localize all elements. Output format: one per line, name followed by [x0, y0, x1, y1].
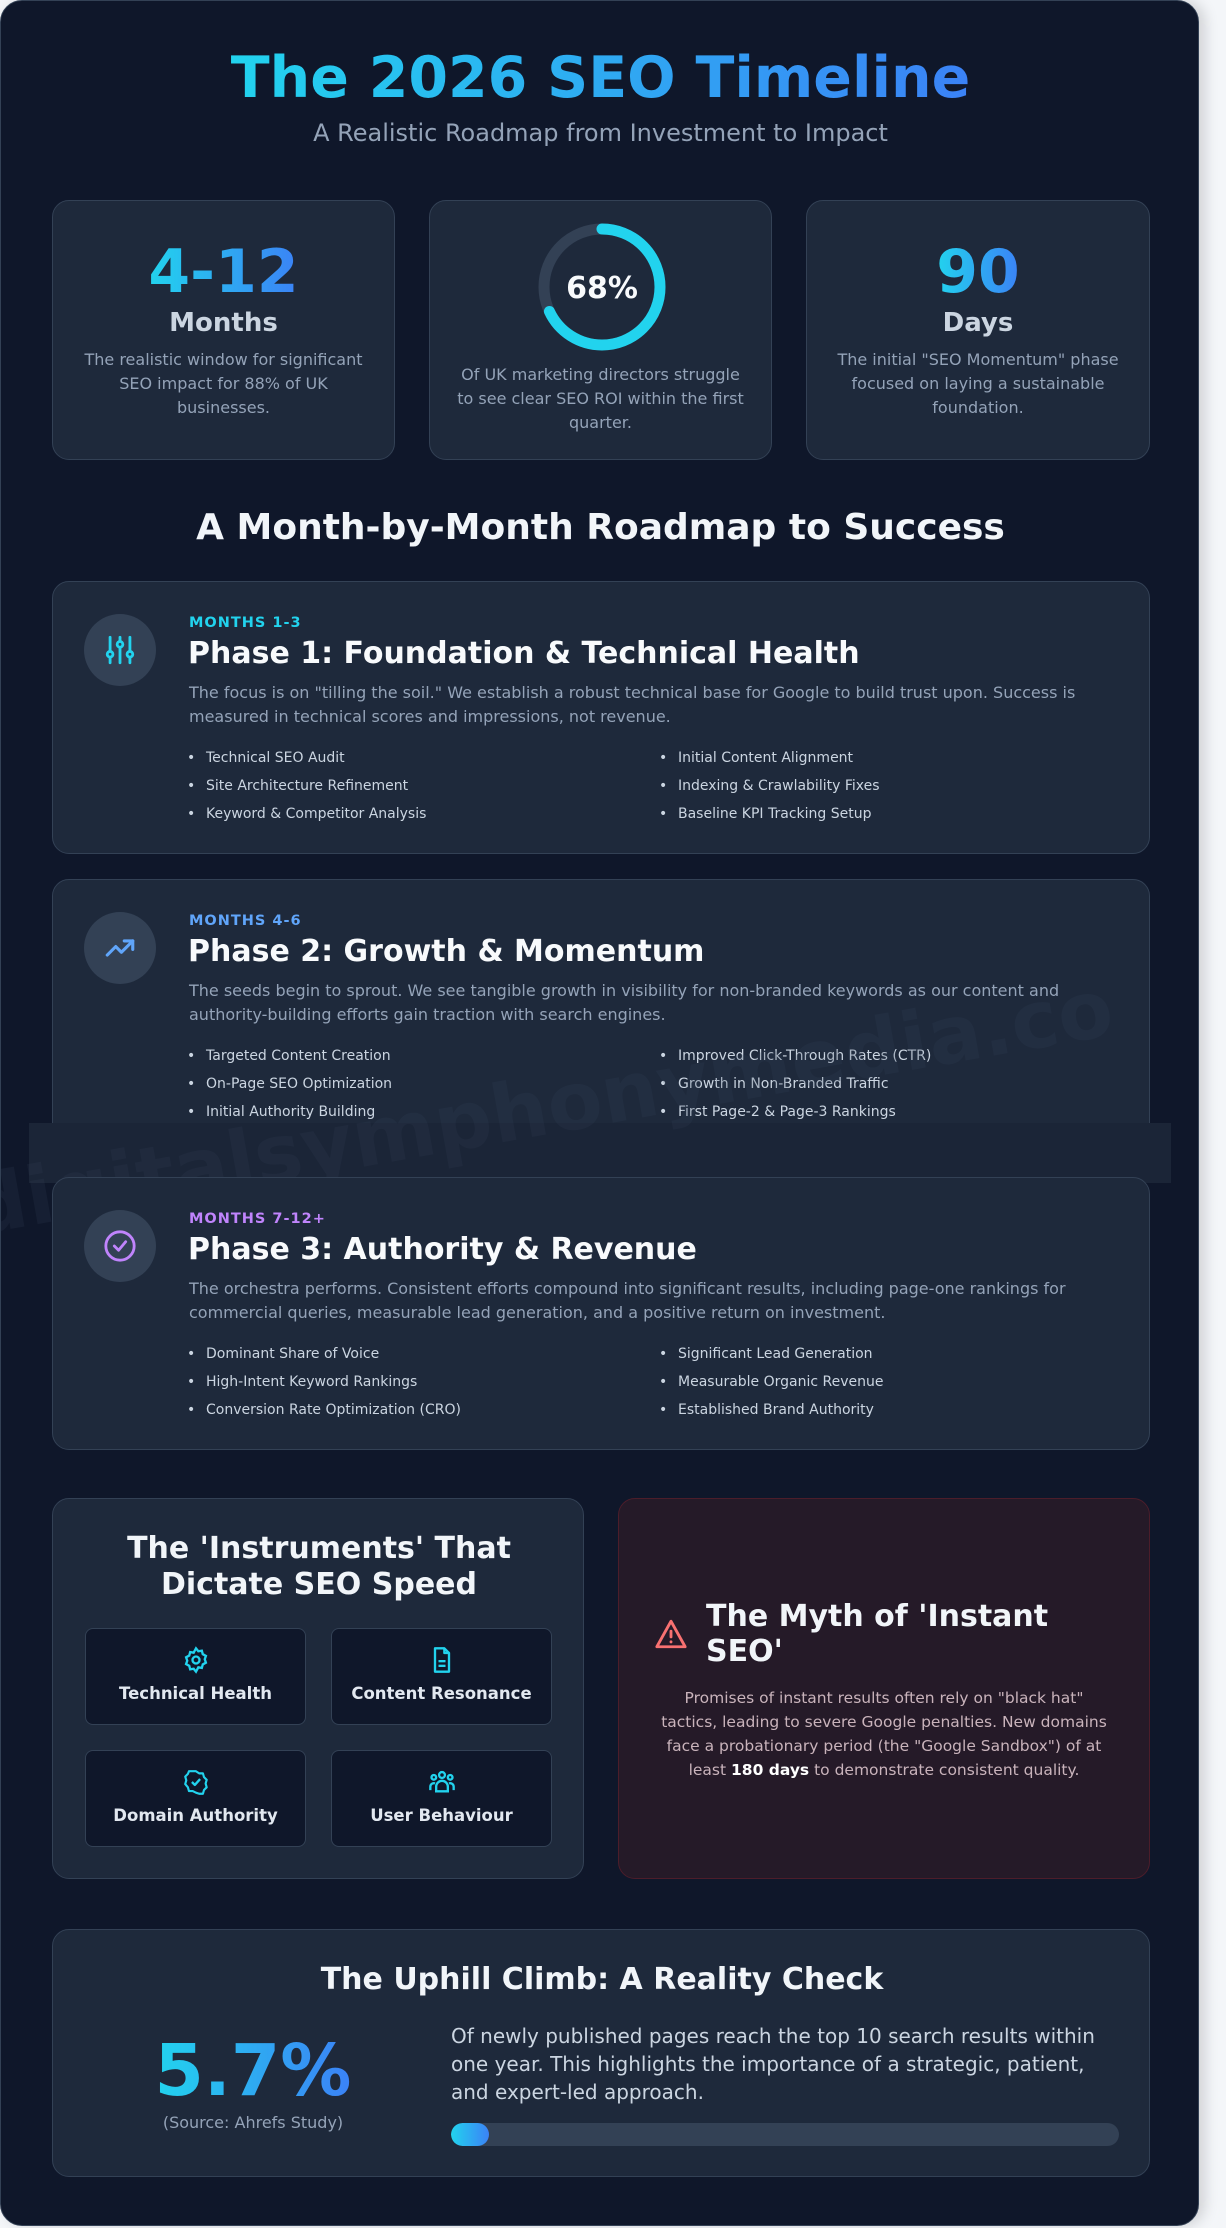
- myth body: Promises of instant results often rely on "black hat": [685, 1689, 1083, 1707]
- phase 1 card: Baseline KPI Tracking Setup: [678, 806, 872, 822]
- instruments heading: [127, 1531, 511, 1602]
- instrument: user behaviour: User Behaviour: [370, 1806, 513, 1825]
- instrument: user behaviour: [331, 1750, 552, 1847]
- icon: sliders: [84, 614, 156, 686]
- stat card: 90 days: Days: [943, 308, 1013, 338]
- phase 3 card: Dominant Share of Voice: [206, 1346, 379, 1362]
- stat card: 4-12 months: [52, 200, 395, 460]
- phase 3 card: Measurable Organic Revenue: [678, 1374, 884, 1390]
- stat card: 68% donut: [429, 200, 772, 460]
- phase 1 card: Phase 1: Foundation & Technical Health: [188, 636, 860, 671]
- stat card: 4-12 months: The realistic window for significant SEO impact for 88% of UK businesses.: [84, 350, 363, 417]
- phase 3 card: Established Brand Authority: [678, 1402, 874, 1418]
- instrument: domain authority: [85, 1750, 306, 1847]
- panel: myth of instant SEO: [618, 1498, 1150, 1879]
- myth heading: [706, 1599, 1048, 1669]
- donut chart: [538, 224, 666, 350]
- phase 2 card: Phase 2: Growth & Momentum: [188, 934, 704, 969]
- phase 2 card: Initial Authority Building: [206, 1104, 375, 1120]
- stat card: 68% donut: Of UK marketing directors struggle to see clear SEO ROI within the first quarter.: [457, 365, 744, 432]
- phase 1 card: MONTHS 1-3: [189, 615, 302, 631]
- phase 3 card: Significant Lead Generation: [678, 1346, 873, 1362]
- phase 1 card: Site Architecture Refinement: [206, 778, 408, 794]
- instrument: technical health: Technical Health: [119, 1684, 272, 1703]
- phase 2 card: Targeted Content Creation: [206, 1048, 391, 1064]
- reality text: Of newly published pages reach the top 10 search results within one year. This highlights the importance of a strategic, patient, and expert-led approach.: [451, 2024, 1095, 2104]
- section heading: A Month-by-Month Roadmap to Success: [196, 507, 1005, 548]
- instrument: content resonance: Content Resonance: [351, 1684, 532, 1703]
- reality heading: The Uphill Climb: A Reality Check: [321, 1962, 883, 1997]
- phase 2 card: MONTHS 4-6: [189, 913, 302, 929]
- watermark band: [29, 1123, 1171, 1183]
- phase 1 card: Initial Content Alignment: [678, 750, 853, 766]
- myth heading: The Myth of 'Instant: [706, 1599, 1048, 1634]
- phase 1 card: Indexing & Crawlability Fixes: [678, 778, 880, 794]
- phase 1 card: Technical SEO Audit: [206, 750, 345, 766]
- phase 2 card: Growth in Non-Branded Traffic: [678, 1076, 889, 1092]
- phase 1 card: Keyword & Competitor Analysis: [206, 806, 426, 822]
- icon: trend: [84, 912, 156, 984]
- phase 3 card: MONTHS 7-12+: [189, 1211, 326, 1227]
- stat card: 90 days: 90: [936, 237, 1020, 307]
- instruments heading: The 'Instruments' That: [127, 1531, 511, 1566]
- phase 2 card: On-Page SEO Optimization: [206, 1076, 392, 1092]
- instruments heading: Dictate SEO Speed: [161, 1567, 477, 1602]
- source note: (Source: Ahrefs Study): [163, 2113, 343, 2132]
- icon: warning: [655, 1620, 687, 1648]
- myth heading: SEO': [706, 1634, 783, 1669]
- phase 1 card: The focus is on "tilling the soil." We establish a robust technical base for Google to build trust upon. Success is measured in technical scores and impressions, not revenue.: [189, 683, 1075, 726]
- progress bar: [451, 2123, 1119, 2146]
- donut chart: 68%: [566, 271, 638, 306]
- phase 1 card: [52, 581, 1150, 854]
- instrument: technical health: [85, 1628, 306, 1725]
- phase 3 card: The orchestra performs. Consistent efforts compound into significant results, including page-one rankings for commercial queries, measurable lead generation, and a positive return on investment.: [189, 1279, 1066, 1322]
- phase 3 card: Phase 3: Authority & Revenue: [188, 1232, 697, 1267]
- title: The 2026 SEO Timeline: [231, 45, 970, 111]
- icon: check circle: [84, 1210, 156, 1282]
- phase 3 card: High-Intent Keyword Rankings: [206, 1374, 417, 1390]
- stat card: 90 days: [806, 200, 1150, 460]
- phase 3 card: [52, 1177, 1150, 1450]
- stat card: 4-12 months: 4-12: [148, 237, 299, 307]
- subtitle: A Realistic Roadmap from Investment to Impact: [313, 119, 888, 147]
- phase 2 card: [52, 879, 1150, 1152]
- instrument: content resonance: [331, 1628, 552, 1725]
- phase 3 card: Conversion Rate Optimization (CRO): [206, 1402, 461, 1418]
- panel: instruments: [52, 1498, 584, 1879]
- phase 2 card: First Page-2 & Page-3 Rankings: [678, 1104, 896, 1120]
- stat card: 4-12 months: Months: [169, 308, 278, 338]
- instrument: domain authority: Domain Authority: [113, 1806, 278, 1825]
- phase 2 card: Improved Click-Through Rates (CTR): [678, 1048, 931, 1064]
- myth body: tactics, leading to severe Google penalties. New domains face a probationary period (the "Google Sandbox") of at least 180 days to demonstrate consistent quality.: [661, 1713, 1107, 1779]
- stat card: 90 days: The initial "SEO Momentum" phase focused on laying a sustainable foundation.: [837, 350, 1119, 417]
- phase 2 card: The seeds begin to sprout. We see tangible growth in visibility for non-branded keywords as our content and authority-building efforts gain traction with search engines.: [189, 981, 1059, 1024]
- panel: reality check: [52, 1929, 1150, 2177]
- big stat 5.7%: 5.7%: [155, 2029, 351, 2112]
